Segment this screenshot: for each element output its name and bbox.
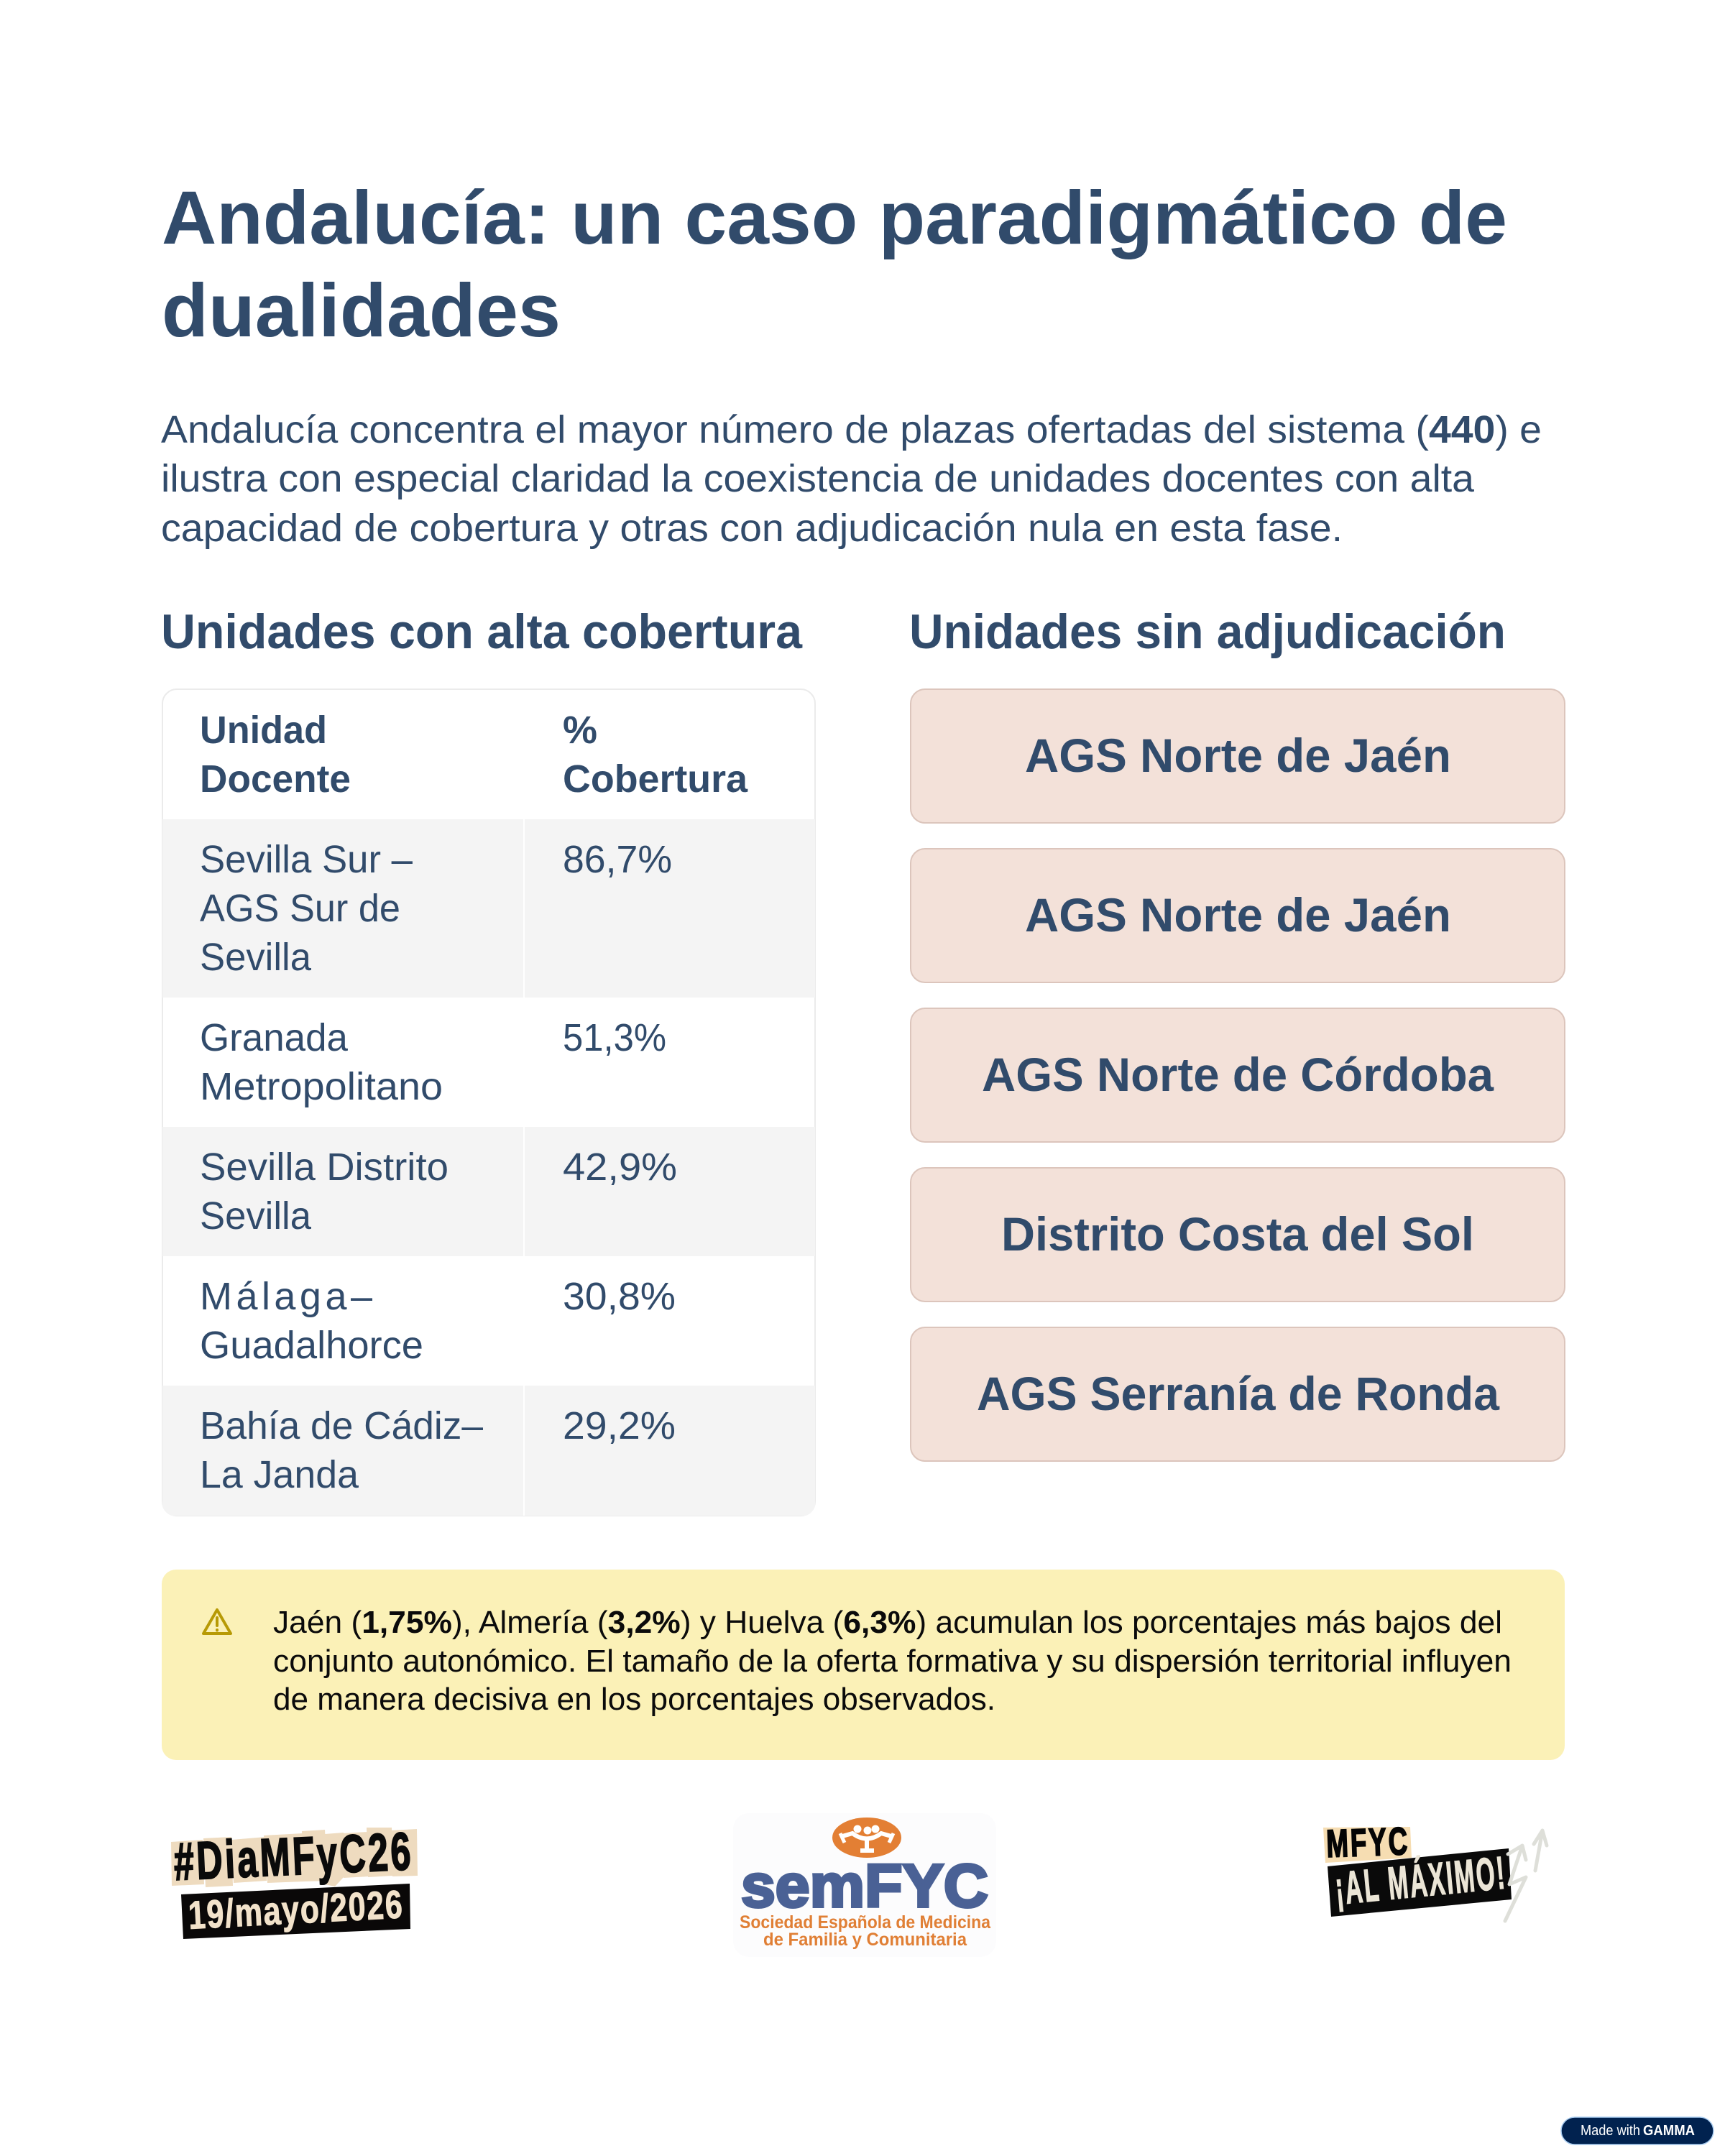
callout text: [273, 1605, 1512, 1717]
row: Sevilla Sur: Sevilla Sur –: [200, 838, 413, 881]
callout: warning note: [162, 1570, 1565, 1760]
badge: made with Gamma: GAMMA: [1643, 2123, 1695, 2139]
panel: coverage table: [162, 689, 815, 1516]
logo: MFYC al máximo: MFYC: [1325, 1819, 1408, 1866]
intro paragraph: Andalucía concentra el mayor número de plazas ofertadas del sistema ( 440) e: [161, 408, 1542, 451]
row: Sevilla Distrito: Sevilla: [200, 1194, 312, 1238]
callout text: de manera decisiva en los porcentajes observados.: [273, 1682, 995, 1717]
row: Bahía de Cádiz: Bahía de Cádiz–: [200, 1404, 483, 1447]
row: Málaga: 30,8%: [563, 1275, 676, 1318]
row: Sevilla Sur: AGS Sur de: [200, 887, 400, 930]
row: Sevilla Distrito: Sevilla Distrito: [200, 1146, 448, 1189]
panel: unit card 2: [911, 849, 1565, 982]
row: Sevilla Sur: [200, 838, 672, 979]
logo: #DiaMFyC26 date sticker: [171, 1823, 418, 1939]
row: Málaga: Guadalhorce: [200, 1324, 423, 1367]
panel: unit card 5: [911, 1327, 1565, 1461]
logo: semFYC: semFYC: [741, 1852, 988, 1920]
panel: unit card 4: [911, 1168, 1565, 1302]
row: Bahía de Cádiz: 29,2%: [563, 1404, 676, 1447]
icon: orange emblem: [832, 1818, 901, 1858]
row: Granada: Metropolitano: [200, 1065, 443, 1108]
row: Málaga: Málaga–: [200, 1275, 372, 1318]
title: dualidades: [162, 269, 561, 353]
heading: high coverage units: Unidades con alta cobertura: [161, 604, 803, 659]
row: Granada: Granada: [200, 1016, 349, 1059]
row: Granada: 51,3%: [563, 1016, 666, 1059]
logo: #DiaMFyC26 date sticker: 19/mayo/2026: [187, 1882, 403, 1938]
panel: unit card 3: [911, 1008, 1565, 1142]
row: Málaga: [200, 1275, 676, 1367]
badge: made with Gamma: [1561, 2117, 1714, 2145]
badge: made with Gamma: Made with: [1581, 2123, 1640, 2139]
logo: semFYC: de Familia y Comunitaria: [763, 1930, 967, 1950]
intro paragraph: ilustra con especial claridad la coexistencia de unidades docentes con alta: [161, 457, 1475, 500]
logo: MFYC al máximo: [1323, 1819, 1547, 1921]
row: Granada: [200, 1016, 666, 1108]
heading: units without allocation: Unidades sin adjudicación: [909, 604, 1506, 659]
logo: MFYC al máximo: ¡AL MÁXIMO!: [1333, 1847, 1506, 1915]
panel: unit card 5: AGS Serranía de Ronda: [977, 1367, 1500, 1420]
row: Bahía de Cádiz: La Janda: [200, 1453, 359, 1496]
table header: %: [563, 709, 597, 752]
row: Sevilla Distrito: [200, 1146, 677, 1238]
table header: Unidad: [200, 709, 327, 752]
panel: unit card 1: [911, 689, 1565, 823]
icon: warning triangle: [203, 1610, 231, 1634]
icon: rising arrows: [1505, 1830, 1547, 1921]
title: Andalucía: un caso paradigmático de: [162, 176, 1507, 260]
table header: Cobertura: [563, 757, 748, 801]
intro paragraph: capacidad de cobertura y otras con adjudicación nula en esta fase.: [161, 507, 1343, 550]
row: Sevilla Distrito: 42,9%: [563, 1146, 677, 1189]
logo: semFYC: Sociedad Española de Medicina: [740, 1912, 991, 1932]
row: Sevilla Sur: 86,7%: [563, 838, 672, 881]
panel: unit card 1: AGS Norte de Jaén: [1025, 729, 1451, 782]
table header: Docente: [200, 757, 351, 801]
callout text: Jaén (1,75%), Almería (3,2%) y Huelva (6,3%) acumulan los porcentajes más bajos del: [273, 1605, 1502, 1640]
panel: unit card 2: AGS Norte de Jaén: [1025, 888, 1451, 941]
table header: [200, 709, 748, 801]
title: [162, 176, 1507, 353]
callout text: conjunto autonómico. El tamaño de la oferta formativa y su dispersión territorial influyen: [273, 1644, 1512, 1679]
intro paragraph: [161, 408, 1542, 550]
panel: unit card 3: AGS Norte de Córdoba: [982, 1048, 1494, 1101]
row: Sevilla Sur: Sevilla: [200, 936, 312, 979]
logo: semFYC: [733, 1813, 996, 1957]
panel: unit card 4: Distrito Costa del Sol: [1001, 1207, 1474, 1261]
logo: #DiaMFyC26 date sticker: #DiaMFyC26: [172, 1823, 412, 1892]
row: Bahía de Cádiz: [200, 1404, 676, 1496]
